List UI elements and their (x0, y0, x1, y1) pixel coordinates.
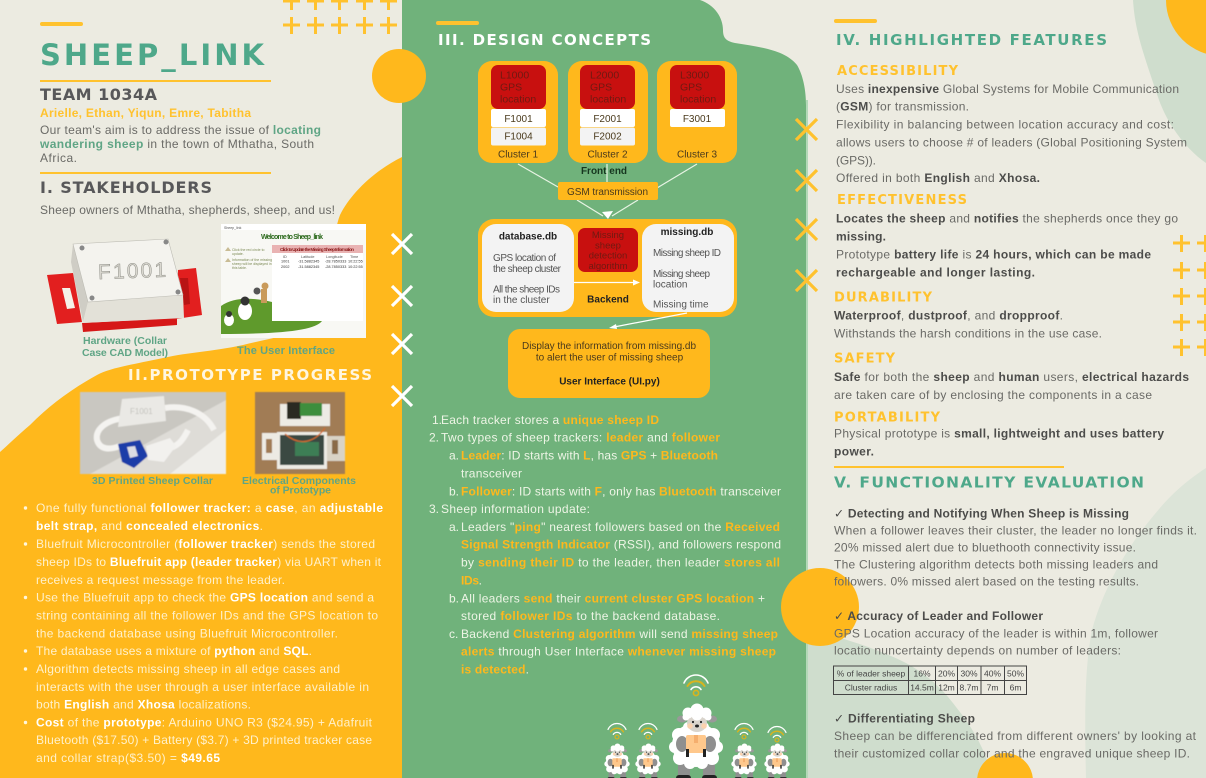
image: hardware collar case CAD model: F1001 (98, 259, 166, 284)
text block: design list: alerts through User Interface whenever missing sheep (461, 645, 776, 659)
effectiveness (836, 193, 1178, 279)
image: user interface screenshot: 10:22:55 (348, 265, 363, 269)
user interface box (508, 329, 710, 398)
cluster 2: L2000 (590, 70, 619, 82)
image: user interface screenshot: Time (350, 255, 358, 259)
accessibility: ACCESSIBILITY (837, 64, 959, 79)
text block: design list: Signal Strength Indicator (RSSI), and followers respond (461, 538, 781, 552)
image: user interface screenshot: Information of the missing (232, 258, 272, 262)
text block: prototype bullet list: and collar strap($3.50) = $49.65 (36, 751, 220, 765)
text block: design list (429, 413, 781, 676)
detecting and notifying: followers. 0% missed alert based on the testing results. (834, 575, 1139, 589)
image: user interface screenshot: 2002 (281, 265, 289, 269)
cluster 2: F2002 (593, 132, 622, 142)
team name: TEAM 1034A (40, 85, 158, 104)
cluster 2 (568, 61, 648, 163)
panel: functionality evaluation (834, 474, 1197, 760)
effectiveness: Locates the sheep and notifies the shepherds once they go (836, 212, 1178, 226)
captions: prototype photos: 3D Printed Sheep Collar (92, 475, 213, 487)
GSM transmission box (558, 182, 658, 200)
text block: design list: Each tracker stores a unique sheep ID (441, 413, 659, 427)
icon: white crosses (392, 234, 412, 406)
image: user interface screenshot: Sheep_link (224, 226, 242, 230)
cluster 1: location (500, 94, 536, 106)
user interface box: to alert the user of missing sheep (536, 352, 684, 364)
effectiveness: rechargeable and longer lasting. (836, 265, 1035, 279)
cluster 1: F1004 (504, 132, 533, 142)
GSM transmission box: GSM transmission (567, 187, 648, 198)
text block: prototype bullet list: the backend database using Bluefruit Microcontroller. (36, 626, 338, 640)
differentiating sheep: Sheep can be differenciated from different owners' by looking at (834, 729, 1197, 743)
backend panel: missing.db (661, 227, 713, 238)
safety: are taken care of by enclosing the components in a case (834, 388, 1152, 402)
text block: prototype bullet list: Algorithm detects missing sheep in all edge cases and (36, 662, 340, 676)
table: cluster radius: 14.5m (910, 682, 934, 692)
backend panel: Missing sheep (653, 269, 710, 280)
safety (834, 352, 1189, 402)
caption: hardware: Case CAD Model) (82, 347, 168, 359)
text block: prototype bullet list: Use the Bluefruit app to check the GPS location and send a (36, 590, 374, 604)
detecting and notifying: When a follower leaves their cluster, the leader no longer finds it. (834, 524, 1197, 538)
backend panel: detection (589, 250, 627, 262)
backend panel: Missing sheep ID (653, 248, 721, 259)
table: cluster radius: 8.7m (960, 682, 978, 692)
cluster 3: location (680, 94, 716, 106)
text block: prototype bullet list (24, 501, 383, 765)
backend panel: location (653, 280, 687, 290)
effectiveness: EFFECTIVENESS (837, 193, 967, 208)
image: user interface screenshot: Click the red circle to (232, 248, 265, 252)
text block: prototype bullet list: receives a request message from the leader. (36, 573, 285, 587)
portability: Physical prototype is small, lightweight and uses battery (834, 426, 1164, 440)
detecting and notifying: The Clustering algorithm detects both missing leaders and (834, 558, 1158, 572)
image: user interface screenshot: sheep will be displayed in (232, 262, 272, 266)
text block: prototype bullet list: Bluefruit Microcontroller (follower tracker) sends the stored (36, 537, 375, 551)
cluster 3: F3001 (683, 114, 712, 125)
cluster 3: GPS (680, 82, 702, 94)
text block: design list: Two types of sheep trackers: leader and follower (441, 431, 720, 445)
table: cluster radius: Cluster radius (845, 682, 897, 692)
stakeholders text: Sheep owners of Mthatha, shepherds, sheep, and us! (40, 203, 335, 217)
cluster 2: GPS (590, 82, 612, 94)
durability: Waterproof, dustproof, and dropproof. (834, 309, 1063, 323)
team members: Arielle, Ethan, Yiqun, Emre, Tabitha (40, 106, 251, 120)
table: cluster radius: 50% (1007, 668, 1024, 678)
text block: design list: Sheep information update: (441, 502, 590, 516)
differentiating sheep: their customized collar color and the engraved unique sheep ID. (834, 746, 1190, 760)
caption: user interface: The User Interface (237, 345, 335, 357)
backend panel: the sheep cluster (493, 264, 562, 275)
durability: Withstands the harsh conditions in the use case. (834, 327, 1102, 341)
arrows to GSM (518, 164, 697, 216)
detecting and notifying: ✓ Detecting and Notifying When Sheep is Missing (834, 506, 1129, 520)
title: SHEEP_LINK (40, 38, 266, 72)
differentiating sheep: ✓ Differentiating Sheep (834, 712, 975, 726)
table: cluster radius: % of leader sheep (837, 668, 906, 678)
icon: flock of sheep with wifi (604, 675, 790, 778)
image: user interface screenshot (221, 224, 366, 338)
detecting and notifying (834, 506, 1197, 589)
text block: design list: c. (449, 627, 458, 641)
text block: design list: stored follower IDs to the backend database. (461, 609, 720, 623)
cluster 2: F2001 (593, 114, 622, 125)
differentiating sheep (834, 712, 1197, 760)
arrow head (602, 211, 613, 219)
image: user interface screenshot: this table. (232, 266, 247, 270)
cluster 2: Cluster 2 (587, 150, 628, 160)
accessibility (836, 64, 1187, 185)
image: electrical components (255, 392, 345, 474)
heading: highlighted features: IV. HIGHLIGHTED FEATURES (836, 31, 1107, 49)
text block: design list: Leader: ID starts with L, has GPS + Bluetooth (461, 449, 718, 463)
portability: power. (834, 444, 874, 458)
backend panel (478, 219, 737, 317)
cluster 3: L3000 (680, 70, 709, 82)
text block: design list: a. (449, 449, 459, 463)
backend panel: Missing time (653, 300, 709, 310)
icon: plus grid top left (283, 0, 397, 34)
accuracy: locatio nuncertainty depends on number of leaders: (834, 644, 1121, 658)
captions: prototype photos (92, 475, 356, 496)
cluster 1: Cluster 1 (498, 150, 538, 160)
accessibility: Offered in both English and Xhosa. (836, 171, 1040, 185)
cluster 1 (478, 61, 558, 163)
table: cluster radius: 20% (938, 668, 955, 678)
team aim: wandering sheep in the town of Mthatha, South (39, 137, 314, 151)
panel: design concepts heading (436, 21, 651, 49)
heading: stakeholders: I. STAKEHOLDERS (40, 178, 212, 197)
text block: design list: 2. (429, 431, 439, 445)
image: 3D printed sheep collar (80, 392, 226, 474)
text block: prototype bullet list: sheep IDs to Bluefruit app (leader tracker) via UART when it (36, 555, 382, 569)
image: user interface screenshot: -28.7850333 (325, 260, 346, 264)
table: cluster radius: 40% (984, 668, 1001, 678)
table: cluster radius: 7m (987, 682, 998, 692)
cluster 1: L1000 (500, 70, 529, 82)
panel: design concepts heading: III. DESIGN CONCEPTS (438, 31, 651, 49)
image: user interface screenshot: update. (232, 252, 244, 256)
image: user interface screenshot: -31.5882345 (298, 260, 319, 264)
cluster 1: F1001 (504, 114, 533, 125)
image: user interface screenshot: 10:22:55 (348, 260, 363, 264)
table: cluster radius: 30% (960, 668, 978, 678)
text block: prototype bullet list: Cost of the prototype: Arduino UNO R3 ($24.95) + Adafruit (36, 716, 373, 730)
text block: design list: is detected. (461, 662, 529, 676)
text block: prototype bullet list: One fully functional follower tracker: a case, an adjustable (36, 501, 383, 515)
text block: prototype bullet list: The database uses a mixture of python and SQL. (36, 644, 312, 658)
backend panel: All the sheep IDs (493, 284, 560, 296)
cluster 2: location (590, 94, 626, 106)
user interface box: Display the information from missing.db (522, 341, 696, 352)
team aim: Our team's aim is to address the issue of locating (40, 123, 321, 137)
image: user interface screenshot: Welcome to Sheep_link (261, 234, 323, 241)
table: cluster radius: 16% (913, 668, 931, 678)
text block: design list: transceiver (461, 466, 522, 480)
image: 3D printed sheep collar: F1001 (130, 407, 153, 416)
accessibility: allows users to choose # of leaders (Global Positioning System (836, 135, 1187, 149)
text block: prototype bullet list: interacts with the user through a user interface available in (36, 680, 369, 694)
cluster 3: Cluster 3 (677, 150, 717, 160)
text block: design list: by sending their ID to the leader, then leader stores all (461, 556, 780, 570)
text block: design list: Follower: ID starts with F, only has Bluetooth transceiver (461, 484, 781, 498)
text block: prototype bullet list: string containing all the follower IDs and the GPS location to (36, 608, 378, 622)
text block: design list: b. (449, 484, 459, 498)
image: user interface screenshot: Longitude (326, 255, 343, 259)
safety: Safe for both the sheep and human users, electrical hazards (834, 370, 1189, 384)
effectiveness: missing. (836, 230, 886, 244)
front end label: Front end (581, 166, 627, 177)
cluster 3 (657, 61, 737, 163)
text block: prototype bullet list: belt strap, and concealed electronics. (36, 519, 263, 533)
text block: prototype bullet list: both English and Xhosa localizations. (36, 698, 251, 712)
team aim (39, 123, 321, 165)
backend panel: algorithm (588, 261, 628, 272)
detecting and notifying: 20% missed alert due to bluethooth connectivity issue. (834, 541, 1136, 555)
panel: highlighted features (834, 19, 1189, 468)
durability (834, 291, 1102, 341)
durability: DURABILITY (834, 291, 933, 306)
text block: design list: 1. (432, 413, 442, 427)
text block: design list: IDs. (461, 573, 482, 587)
text block: design list: 3. (429, 502, 439, 516)
image: user interface screenshot: Latitude (301, 255, 315, 259)
accessibility: (GSM) for transmission. (836, 100, 969, 114)
text block: design list: Leaders "ping" nearest followers based on the Received (461, 520, 780, 534)
image: user interface screenshot: -31.5882345 (298, 265, 319, 269)
portability: PORTABILITY (834, 411, 941, 426)
effectiveness: Prototype battery life is 24 hours, which can be made (836, 247, 1151, 261)
accessibility: Uses inexpensive Global Systems for Mobile Communication (836, 82, 1179, 96)
accuracy: ✓ Accuracy of Leader and Follower (834, 609, 1043, 623)
captions: prototype photos: Electrical Components (242, 475, 356, 487)
text block: design list: b. (449, 591, 459, 605)
icon: plus grid right (1173, 235, 1206, 356)
backend panel: Missing (592, 230, 624, 241)
accessibility: (GPS)). (836, 153, 876, 167)
image: user interface screenshot: Click to Update the Missing Sheep Information (280, 247, 354, 252)
safety: SAFETY (834, 352, 896, 367)
backend panel: in the cluster (493, 295, 550, 306)
caption: hardware (82, 335, 168, 359)
image: user interface screenshot: 1001 (281, 260, 289, 264)
table: cluster radius: 6m (1010, 682, 1021, 692)
backend panel: sheep (595, 240, 621, 252)
image: user interface screenshot: -28.7850333 (325, 265, 346, 269)
portability (834, 411, 1164, 458)
backend panel: GPS location of (493, 253, 556, 264)
cluster 1: GPS (500, 82, 522, 94)
arrow to user interface (609, 313, 687, 329)
text block: prototype bullet list: Bluetooth ($17.50) + Battery ($3.7) + 3D printed tracker case (36, 733, 372, 747)
image: hardware collar case CAD model (47, 239, 202, 332)
caption: hardware: Hardware (Collar (83, 335, 167, 347)
text block: design list: a. (449, 520, 459, 534)
user interface box: User Interface (UI.py) (559, 376, 660, 388)
table: cluster radius (834, 666, 1026, 694)
heading: functionality evaluation: V. FUNCTIONALITY EVALUATION (834, 474, 1144, 492)
backend panel: database.db (499, 232, 557, 242)
heading: prototype progress: II.PROTOTYPE PROGRESS (128, 366, 372, 384)
diagram: system architecture (478, 61, 737, 398)
accessibility: Flexibility in balancing between location accuracy and cost: (836, 118, 1174, 132)
icon: yellow crosses (796, 119, 817, 291)
text block: design list: All leaders send their current cluster GPS location + (461, 591, 765, 605)
accuracy (834, 609, 1158, 658)
panel: introduction (39, 22, 321, 174)
text block: design list: Backend Clustering algorithm will send missing sheep (461, 627, 778, 641)
accuracy: GPS Location accuracy of the leader is within 1m, follower (834, 626, 1158, 640)
table: cluster radius: 12m (938, 682, 955, 692)
backend panel: Backend (587, 294, 629, 306)
team aim: Africa. (40, 151, 77, 165)
image: user interface screenshot: ID (283, 255, 287, 259)
captions: prototype photos: of Prototype (270, 484, 331, 496)
